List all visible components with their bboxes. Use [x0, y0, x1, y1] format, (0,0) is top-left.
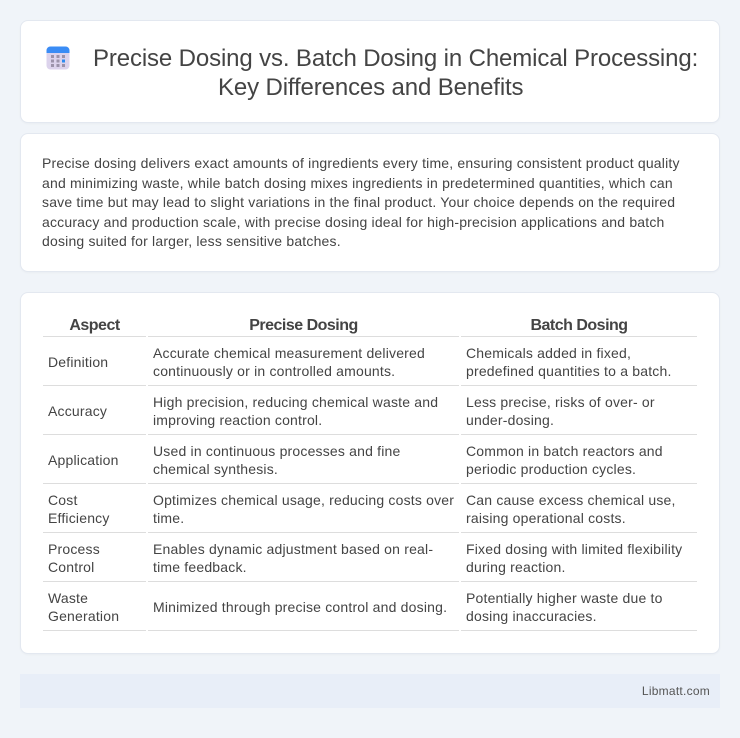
footer text: Libmatt.com [642, 684, 710, 698]
row: accuracy [48, 394, 655, 428]
title line 2: Key Differences and Benefits [218, 74, 523, 101]
text: High precision, reducing chemical waste and [153, 394, 438, 410]
table header: batch dosing: Batch Dosing [530, 317, 628, 334]
summary text: accuracy and production scale, with precise dosing ideal for high-precision applications and batch [42, 214, 665, 230]
row: definition [48, 345, 672, 379]
icon: calendar [46, 46, 70, 70]
text: Can cause excess chemical use, [466, 492, 676, 508]
summary text: dosing suited for larger, less sensitive batches. [42, 233, 341, 249]
text: chemical synthesis. [153, 461, 278, 477]
text: time. [153, 510, 184, 526]
row: cost efficiency [48, 492, 676, 526]
text: Generation [48, 608, 119, 624]
text: Waste [48, 590, 88, 606]
text: dosing inaccuracies. [466, 608, 597, 624]
summary text: Precise dosing delivers exact amounts of ingredients every time, ensuring consistent product quality [42, 155, 680, 171]
summary text [42, 155, 680, 249]
text: time feedback. [153, 559, 247, 575]
text: Process [48, 541, 100, 557]
text: continuously or in controlled amounts. [153, 363, 395, 379]
text: Definition [48, 354, 108, 370]
text: Fixed dosing with limited flexibility [466, 541, 682, 557]
footer bar [20, 674, 720, 708]
text: Common in batch reactors and [466, 443, 663, 459]
text: Control [48, 559, 94, 575]
text: Accuracy [48, 403, 107, 419]
table header: batch dosing [461, 316, 697, 337]
text: Minimized through precise control and dosing. [153, 599, 447, 615]
text: Cost [48, 492, 78, 508]
text: Potentially higher waste due to [466, 590, 663, 606]
text: periodic production cycles. [466, 461, 636, 477]
panel: comparison table [20, 292, 720, 654]
title: Precise Dosing vs. Batch Dosing in Chemical Processing: [93, 45, 698, 72]
text: Used in continuous processes and fine [153, 443, 401, 459]
text: Optimizes chemical usage, reducing costs over [153, 492, 454, 508]
panel: header [20, 20, 720, 123]
row: application [48, 443, 663, 477]
text: Enables dynamic adjustment based on real- [153, 541, 433, 557]
panel: summary [20, 133, 720, 272]
table header: precise dosing [148, 316, 459, 337]
text: predefined quantities to a batch. [466, 363, 672, 379]
summary text: and minimizing waste, while batch dosing mixes ingredients in predetermined quantities, which can [42, 175, 673, 191]
table header: aspect [43, 316, 146, 337]
table header: aspect: Aspect [69, 317, 120, 334]
text: Chemicals added in fixed, [466, 345, 631, 361]
text: Application [48, 452, 119, 468]
text: under-dosing. [466, 412, 554, 428]
text: raising operational costs. [466, 510, 626, 526]
text: Less precise, risks of over- or [466, 394, 655, 410]
text: Accurate chemical measurement delivered [153, 345, 425, 361]
row: process control [48, 541, 682, 575]
summary text: save time but may lead to slight variations in the final product. Your choice depends on the required [42, 194, 675, 210]
text: during reaction. [466, 559, 566, 575]
table header: precise dosing: Precise Dosing [249, 317, 358, 334]
text: Efficiency [48, 510, 110, 526]
text: improving reaction control. [153, 412, 322, 428]
row: waste generation [48, 590, 663, 624]
